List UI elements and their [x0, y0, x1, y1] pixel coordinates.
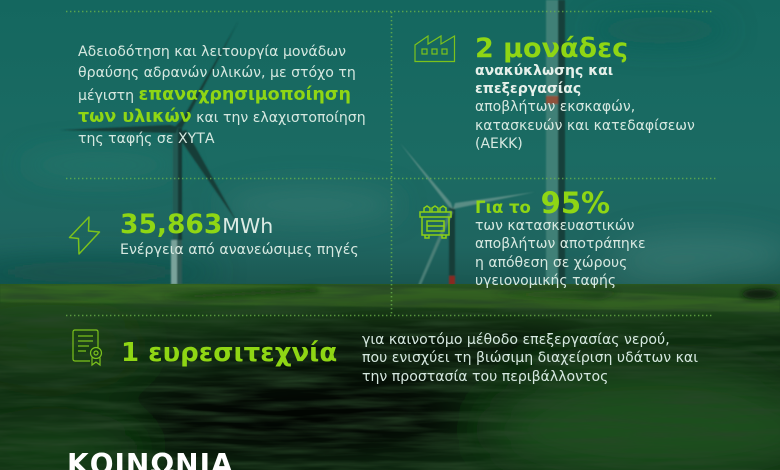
text: patent description: που ενισχύει τη βιώσιμη διαχείριση υδάτων και	[362, 350, 698, 366]
stat: renewable energy	[120, 209, 359, 258]
stat: 2 recycling units	[475, 33, 695, 152]
stat: 95 percent: υγειονομικής ταφής	[475, 273, 616, 289]
icon: lightning bolt	[68, 216, 100, 255]
icon: waste container	[419, 205, 452, 239]
stat: 2 recycling units: επεξεργασίας	[475, 81, 581, 97]
stat: 2 recycling units: 2 μονάδες	[475, 33, 628, 64]
icon: patent certificate	[72, 329, 102, 366]
stat: 95 percent: Για το 95%	[475, 186, 610, 220]
text: patent description: την προστασία του περιβάλλοντος	[362, 369, 608, 385]
stat: 95 percent: η απόθεση σε χώρους	[475, 255, 627, 271]
stat: one patent: 1 ευρεσιτεχνία	[121, 338, 337, 368]
stat: 2 recycling units: (ΑΕΚΚ)	[475, 136, 523, 152]
text: patent description	[362, 332, 698, 385]
stat: renewable energy: 35,863MWh	[120, 209, 273, 240]
stat: renewable energy: Ενέργεια από ανανεώσιμες πηγές	[120, 242, 359, 258]
text: licensing of crushing units	[78, 44, 366, 147]
stat: 2 recycling units: αποβλήτων εκσκαφών,	[475, 99, 635, 115]
text: licensing of crushing units: Αδειοδότηση και λειτουργία μονάδων	[78, 44, 346, 60]
stat: 2 recycling units: κατασκευών και κατεδαφίσεων	[475, 118, 695, 134]
text: licensing of crushing units: μέγιστη επαναχρησιμοποίηση	[78, 85, 351, 105]
text: licensing of crushing units: θραύσης αδρανών υλικών, με στόχο τη	[78, 65, 356, 81]
text: licensing of crushing units: των υλικών και την ελαχιστοποίηση	[78, 107, 366, 127]
text: patent description: για καινοτόμο μέθοδο επεξεργασίας νερού,	[362, 332, 670, 348]
stat: 95 percent: των κατασκευαστικών	[475, 218, 634, 234]
stat: 2 recycling units: ανακύκλωσης και	[475, 63, 613, 79]
icon: factory	[414, 35, 456, 62]
stat: 95 percent: αποβλήτων αποτράπηκε	[475, 236, 646, 252]
stat: 95 percent	[475, 186, 646, 289]
text: licensing of crushing units: της ταφής σε ΧΥΤΑ	[78, 131, 214, 147]
